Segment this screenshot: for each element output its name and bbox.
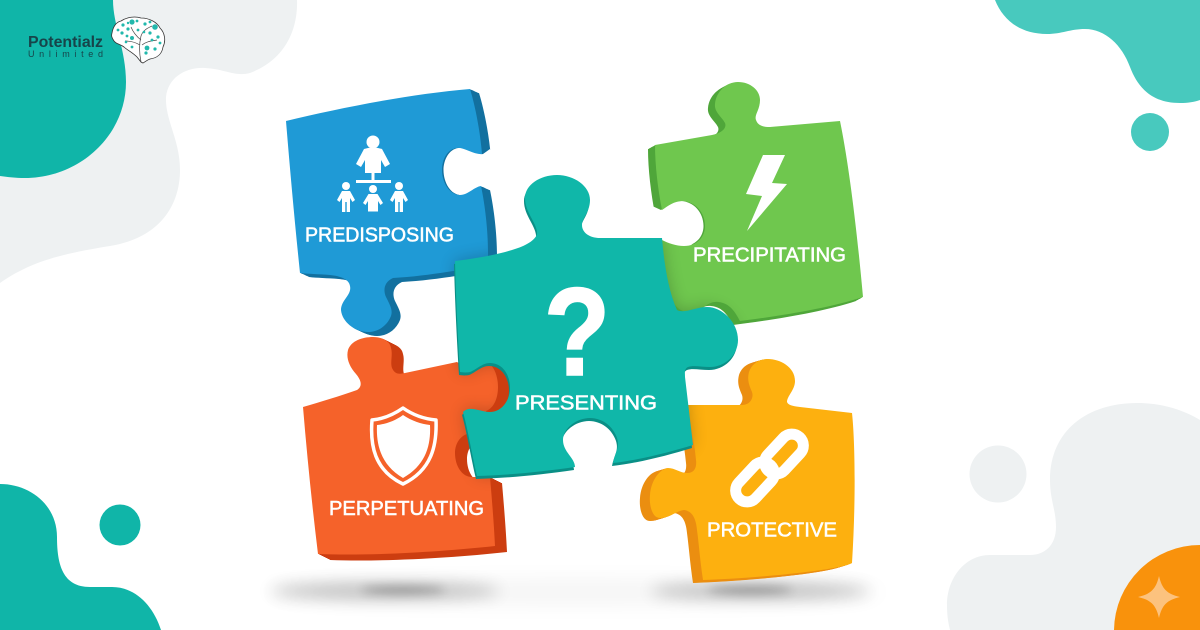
background: teal blob bottom left: [0, 484, 161, 630]
label: predisposing: PREDISPOSING: [305, 224, 454, 246]
background: teal dot bottom left: [100, 504, 140, 546]
background: grey blob bottom right: [947, 403, 1200, 630]
background: teal blob top right: [995, 0, 1200, 103]
label: precipitating: PRECIPITATING: [693, 244, 846, 266]
label: protective: PROTECTIVE: [707, 518, 837, 542]
puzzle piece: precipitating (green): [648, 82, 863, 325]
background: grey blob top left: [0, 0, 297, 283]
background: grey dot right: [970, 446, 1026, 502]
background: teal blob top left: [0, 0, 126, 178]
background: orange quarter circle with star: [1114, 545, 1200, 630]
logo: Potentialz Unlimited: Potentialz: [28, 34, 103, 51]
background: teal dot top right: [1131, 113, 1169, 151]
icon: question mark: ?: [544, 262, 610, 402]
logo: Potentialz Unlimited: [28, 17, 165, 63]
label: perpetuating: PERPETUATING: [329, 497, 484, 520]
puzzle piece: perpetuating (orange): [303, 337, 510, 561]
label: presenting: PRESENTING: [515, 392, 657, 414]
ground shadows: [265, 583, 885, 601]
icon: chain link: [731, 429, 808, 507]
soft shadow cast by the centre piece: [448, 240, 712, 483]
icon: shield: [372, 408, 436, 484]
logo: Potentialz Unlimited: Unlimited: [28, 49, 103, 59]
icon: lightning bolt: [746, 155, 787, 231]
puzzle piece: protective (yellow): [640, 359, 855, 583]
icon: family hierarchy: [337, 136, 408, 212]
puzzle piece: predisposing (blue): [286, 89, 500, 336]
puzzle piece: presenting (teal): [454, 175, 738, 479]
